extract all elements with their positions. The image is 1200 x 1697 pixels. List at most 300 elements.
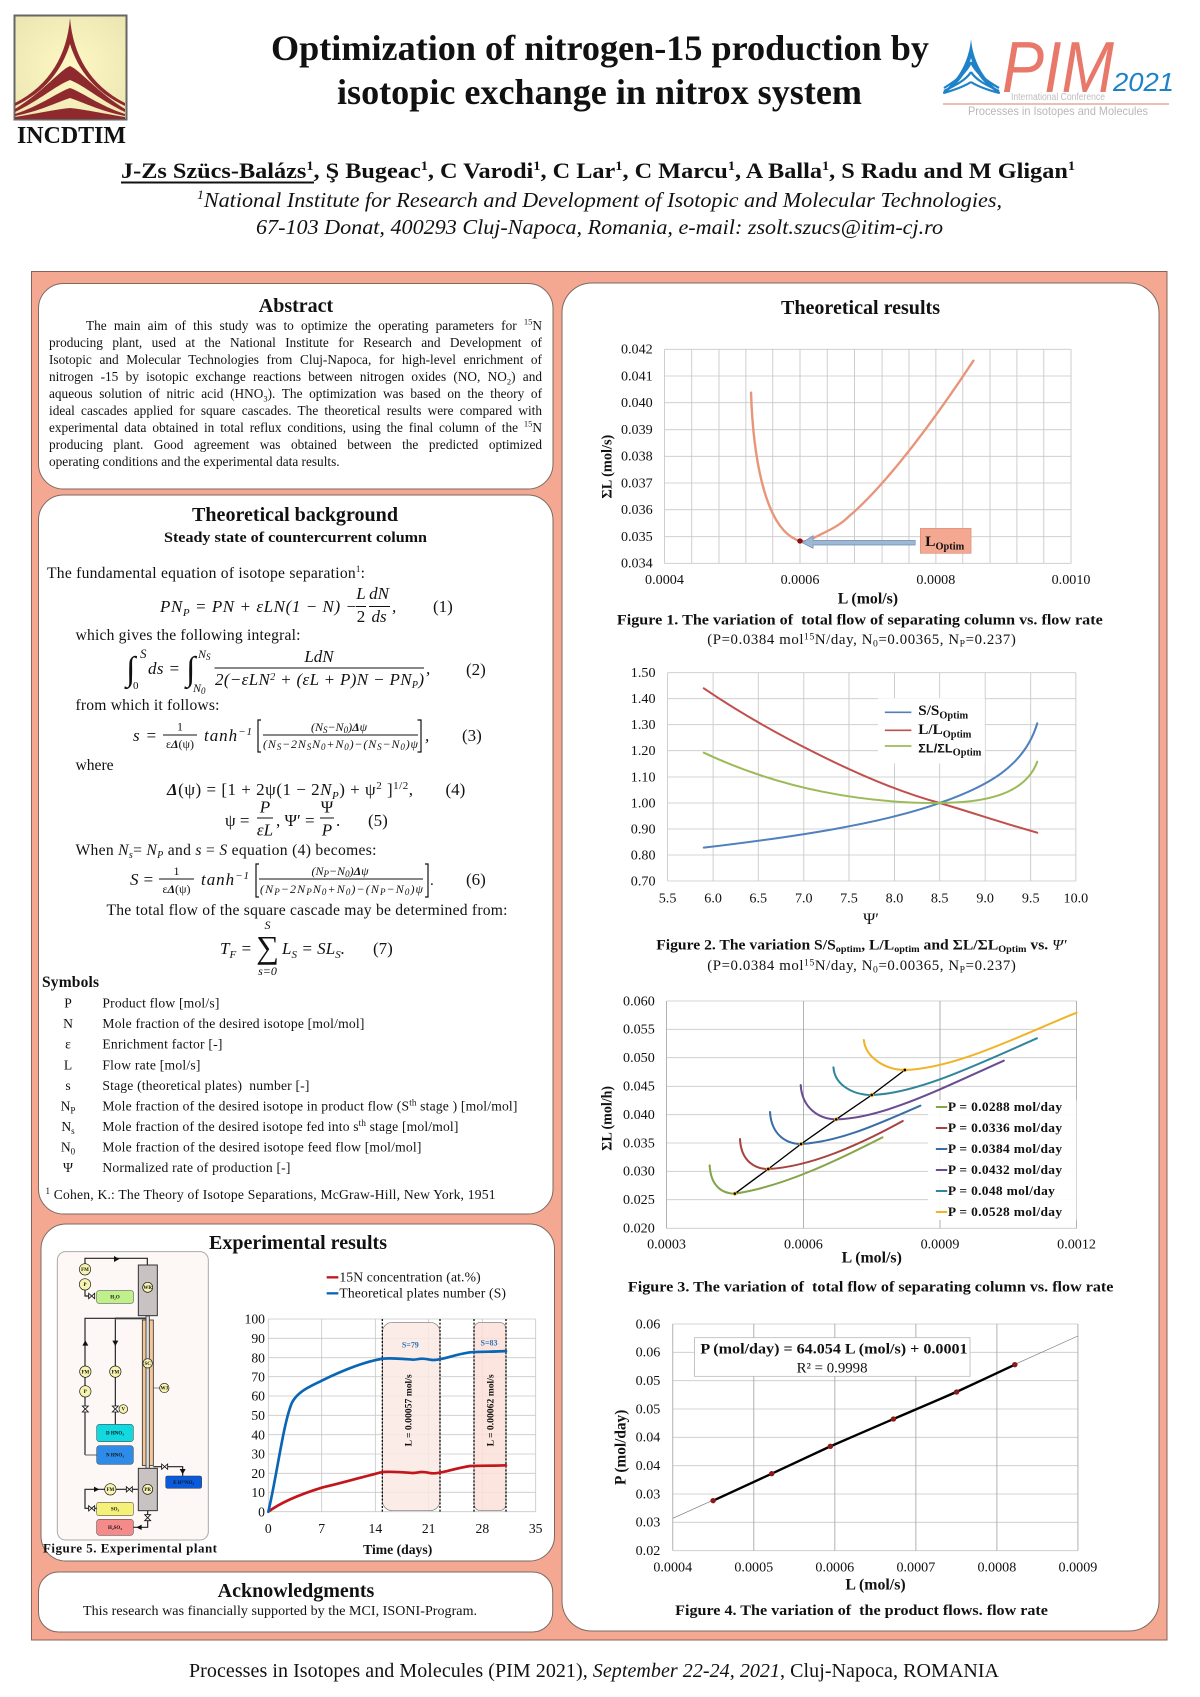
authors: 1 [1068,158,1075,173]
symbols list: th [409,1098,417,1108]
chart: experimental concentration and plates vs time: 80 [251,1350,265,1365]
equation 7: s=0 [258,964,277,978]
equation 6: P [273,887,280,897]
chart: figure 4: 0.0004 [653,1561,692,1576]
legend: L/L [918,722,943,738]
chart: experimental concentration and plates vs time: 0 [265,1521,272,1536]
symbols list: Mole fraction of the desired isotope in product flow (S [102,1099,409,1114]
chart: figure 3: 0.045 [623,1080,655,1095]
authors: 1 [615,158,622,173]
chart: figure 4: 0.05 [636,1403,660,1417]
chart: experimental concentration and plates vs time [245,1270,543,1558]
chart: figure 2 [631,666,1088,976]
chart: figure 1: 0.041 [621,370,653,384]
chart: figure 3: 0.0009 [921,1238,959,1252]
chart: figure 2: 0.80 [631,849,656,863]
equation 3: S [323,725,328,735]
panel: theoretical background: P [156,850,163,861]
equation 6: . [430,873,434,889]
equation 4: ] [382,780,393,799]
chart: experimental concentration and plates vs time: 50 [251,1408,265,1423]
authors: , C Lar [540,158,616,183]
equation 3: )−(N [349,737,377,751]
background panel [32,272,1167,1640]
panel: theoretical background: from which it follows: [76,697,220,714]
equation 6: εΔ(ψ) [162,882,191,896]
chart: figure 1: =0.237) [966,632,1016,648]
equation 2: S [140,646,147,661]
panel: acknowledgments [38,1572,553,1632]
chart: figure 2: 5.5 [659,892,676,906]
logo: PIM 2021: 2021 [1112,67,1174,97]
equation 5: P [259,798,270,816]
equation 3: −2N [282,737,307,751]
equation 6: (N [311,864,323,878]
chart: figure 2: 9.5 [1022,892,1040,906]
equation 4: 2 [376,780,382,792]
caption: figure 2: Ψ′ [1052,938,1067,953]
legend: ΣL/ΣL [918,742,953,756]
equation 3: S [377,742,382,752]
equation 2: 0 [201,686,206,696]
equation 7: = [236,939,252,958]
chart: figure 2: P [960,966,965,976]
abstract text: producing plant. Good agreement was obtained between the predicted optimized [49,437,542,452]
diagram: experimental plant: D HNO [106,1431,122,1436]
chart: figure 2: 9.0 [976,892,994,906]
equation 4: (4) [446,780,465,799]
equation 6: P [322,869,329,879]
chart: figure 2: 1.50 [631,666,656,681]
legend [928,1099,1077,1220]
diagram: experimental plant: SO [114,1526,120,1531]
authors: , A Balla [735,158,822,183]
equation 4: ) + ψ [339,780,376,799]
diagram: experimental plant: 3 [122,1454,124,1458]
chart: figure 4: 0.04 [636,1431,660,1446]
separating column [142,1316,153,1468]
authors: , S Radu and M Gligan [829,158,1068,183]
chart: figure 4: 0.0005 [734,1561,773,1576]
equation 4 [166,780,465,802]
caption: figure 4: Figure 4. The variation of the product flows. flow rate [675,1603,1049,1619]
equation 3: +N [326,737,344,751]
chart: figure 2: 7.5 [840,892,858,906]
equation 3: 0 [321,742,326,752]
equation 6: N [312,882,322,896]
reference: Cohen, K.: The Theory of Isotope Separations, McGraw-Hill, New York, 1951 [50,1187,496,1202]
caption: figure 2: Figure 2. The variation S/S [656,938,827,953]
diagram: experimental plant: E H [173,1481,182,1486]
authors: 1 [421,158,428,173]
equation 6: Δψ [354,864,369,878]
symbols list: P [70,1106,75,1116]
chart: experimental concentration and plates vs time: Time (days) [363,1542,432,1558]
diagram: experimental plant: H [110,1296,114,1301]
chart: figure 1 [599,343,1103,650]
chart: figure 3: 0.0003 [647,1238,686,1252]
abstract text: aqueous solution of nitric acid (HNO3). The optimization was based on the theory of [49,386,542,404]
chart: figure 2: 1.20 [631,744,656,759]
affiliation: 1 [197,187,204,202]
diagram: experimental plant: 3 [117,1509,119,1513]
symbols list: stage ) [mol/mol] [417,1099,517,1115]
chart: figure 2: 7.0 [795,892,813,906]
symbols list: Mole fraction of the desired isotope feed flow [mol/mol] [102,1140,421,1155]
chart: figure 3: 0.040 [623,1108,655,1123]
legend: P = 0.0288 mol/day [948,1099,1062,1114]
equation 3: 0 [400,742,405,752]
equation 2: 2 [270,672,275,683]
logo: PIM 2021: International Conference [1011,92,1105,103]
diagram: experimental plant: P [83,1283,87,1288]
panel: theoretical background: s = S equation (4) becomes: [195,842,376,859]
caption: figure 2: and ΣL/ΣL [920,938,999,953]
symbols list: N [61,1119,71,1134]
chart: figure 2: (P=0.0384 mol [707,958,803,974]
chart: experimental concentration and plates vs time: 30 [251,1447,265,1462]
equation 6: 0 [346,887,351,897]
chart: figure 4 [612,1318,1097,1619]
equation 3: −N [382,737,400,751]
equation 3: )ψ [405,737,419,751]
chart: figure 1: 15 [804,632,815,642]
symbols list: ε [65,1037,71,1052]
authors: , C Marcu [622,158,728,183]
panel: abstract: Abstract [259,295,334,317]
authors: 1 [728,158,735,173]
diagram: experimental plant [57,1252,208,1540]
equation 6: tanh [201,870,234,889]
chart: figure 3: 0.035 [623,1137,655,1151]
legend: P = 0.0432 mol/day [948,1162,1062,1177]
equation 6: P [305,887,312,897]
authors [121,158,1075,184]
chart: experimental concentration and plates vs time: 20 [251,1466,265,1481]
chart: experimental concentration and plates vs time: 7 [318,1521,325,1536]
caption: figure 2: optim [894,945,920,955]
equation 3: −1 [238,726,252,738]
equation 3: (3) [462,726,482,745]
chart: experimental concentration and plates vs time: 14 [369,1521,382,1536]
PR column [138,1468,157,1511]
equation 6: 0 [405,887,410,897]
symbols list: s [71,1126,75,1136]
chart: figure 2: 8.0 [886,892,903,906]
panel: theoretical background [38,495,553,1214]
symbols list: s [65,1078,71,1093]
chart: figure 1: 0.035 [621,530,653,545]
panel: theoretical background: where [76,757,114,774]
chart: experimental concentration and plates vs time: 35 [529,1521,543,1536]
equation 1: (1) [433,597,453,616]
legend: Optim [953,747,982,758]
chart: figure 1: 0.038 [621,450,653,465]
chart: figure 2: 0.90 [631,823,656,837]
symbols list: N [61,1099,70,1114]
symbols list: L [64,1057,72,1072]
title [271,28,929,112]
chart: figure 1: 0.034 [621,557,653,572]
diagram: experimental plant: 3 [122,1432,124,1436]
abstract text: experimental data obtained in total reflux conditions, using the final column of the 15N [49,419,542,435]
equation 6 [130,864,486,897]
panel: acknowledgments: Acknowledgments [218,1580,375,1602]
symbols list [61,995,517,1175]
legend: Optim [939,710,969,721]
equation 6: 0 [322,887,327,897]
authors: 1 [822,158,829,173]
chart: figure 1: N/day, N [815,632,873,648]
equation 5: . [336,811,340,830]
equation 2: (2) [466,660,486,679]
equation 1: = PN + εLN(1 − N) − [190,597,357,616]
chart: figure 3: 0.050 [623,1051,655,1066]
abstract text: ideal cascades applied for square cascades. The theoretical results were compared with [49,403,542,418]
legend: P = 0.048 mol/day [948,1183,1055,1198]
equation 3: tanh [204,726,237,745]
chart: experimental concentration and plates vs time: 100 [245,1312,265,1327]
chart: figure 1: 0.037 [621,477,653,491]
regression equation: R² = 0.9998 [797,1361,868,1376]
intro line: : [361,565,365,582]
equation 6: P [379,887,386,897]
equation 7: S [264,918,270,932]
equation 3 [133,720,482,752]
symbols list: Stage (theoretical plates) number [-] [102,1078,309,1094]
panel: theoretical background: which gives the following integral: [76,627,300,644]
symbols heading: Symbols [42,974,99,991]
chart: experimental concentration and plates vs time: 0 [258,1504,265,1519]
chart: figure 1: 0.036 [621,503,653,518]
chart: figure 3: 0.0006 [784,1238,823,1252]
equation 2: N [198,647,206,661]
equation 4: , [409,780,413,799]
legend [878,698,985,763]
diagram: experimental plant: 2 [114,1297,116,1301]
symbols list: 0 [71,1147,76,1157]
equation 6: S = [130,870,154,889]
chart: figure 2: Ψ′ [863,910,879,928]
equation 1: P [182,607,190,619]
symbols list: Flow rate [mol/s] [102,1057,200,1072]
equation 2: ∫ [184,651,198,690]
symbols list: stage [mol/mol] [366,1119,458,1134]
equation 4: P [331,790,339,802]
equation 2: , [426,659,430,678]
regression equation: P (mol/day) = 64.054 L (mol/s) + 0.0001 [700,1342,968,1358]
chart: figure 3: 0.030 [623,1165,655,1180]
equation 2: + (εL + P)N − PN [276,670,413,689]
equation 3: N [311,737,321,751]
equation 3: S [277,742,282,752]
chart: figure 2: 0 [873,966,878,976]
chart: figure 4: L (mol/s) [845,1577,906,1593]
symbols list: Mole fraction of the desired isotope fed into s [102,1119,359,1134]
equation 1 [159,584,453,626]
authors: , C Varodi [428,158,533,183]
equation 3: −N [327,720,345,734]
chart: figure 1: =0.00365, N [878,632,960,648]
logo: INCDTIM [14,16,126,149]
diagram: experimental plant: FM [111,1370,120,1375]
chart: figure 4: 0.0006 [815,1561,854,1576]
panel: theoretical background: The total flow of the square cascade may be determined from: [106,902,508,919]
caption: figure 3: Figure 3. The variation of total flow of separating column vs. flow rate [628,1280,1114,1296]
caption: figure 2: vs. [1027,938,1052,953]
equation 6: −N [329,864,346,878]
chart: figure 1: 0.0006 [781,573,819,588]
symbols list: P [64,995,72,1010]
chart: figure 2: 1.00 [631,797,656,811]
equation 5: , Ψ′ = [276,811,315,830]
chart: figure 2: =0.237) [966,958,1016,974]
abstract text: The main aim of this study was to optimize the operating parameters for 15N [86,317,542,333]
legend: P = 0.0528 mol/day [948,1204,1062,1219]
chart: experimental concentration and plates vs time: Theoretical plates number (S) [339,1286,506,1302]
chart: figure 4: 0.0007 [896,1561,935,1576]
equation 5: P [321,820,332,840]
equation 7: (7) [373,939,393,958]
panel: experimental results [41,1224,554,1561]
title: isotopic exchange in nitrox system [337,72,862,112]
equation 5: (5) [368,811,388,830]
diagram: experimental plant: PR [144,1488,151,1493]
equation 5: Ψ [321,798,334,816]
equation 3: (N [263,737,276,751]
diagram: experimental plant: SC [144,1362,151,1367]
legend: S/S [918,703,939,719]
intro line: The fundamental equation of isotope separation [47,565,356,582]
affiliation [197,187,1002,239]
equation 1: , [392,597,396,616]
chart: figure 4: 0.02 [636,1544,660,1559]
chart: figure 1: P [960,640,965,650]
chart: figure 3: 0.0012 [1057,1238,1096,1252]
chart: figure 4: 0.06 [636,1346,660,1361]
equation 6: 0 [345,869,350,879]
chart: figure 2: 15 [804,958,815,968]
equation 2: N [193,681,201,695]
title: Optimization of nitrogen-15 production by [271,28,929,68]
logo: INCDTIM: INCDTIM [17,123,126,149]
chart: figure 1: 0.0004 [645,573,684,588]
equation 2: S [206,652,211,662]
abstract text: operating conditions and the experimental data results. [49,454,340,469]
chart: figure 4: P (mol/day) [612,1410,630,1485]
symbols list: N [61,1140,71,1155]
intro line: 1 [356,564,360,574]
chart: figure 3: L (mol/s) [842,1250,902,1267]
abstract text: Isotopic and Molecular Technologies from Cluj-Napoca, for high-level enrichment of [49,352,542,367]
diagram: experimental plant: NO [185,1481,193,1486]
chart: figure 1: ΣL (mol/s) [599,435,615,499]
chart: figure 3: 0.025 [623,1193,655,1208]
equation 3: , [425,726,429,745]
chart: figure 2: 1.10 [631,771,656,785]
diagram: experimental plant: O [116,1296,120,1301]
equation 2 [124,646,486,696]
caption: figure 2: Optim [998,945,1027,955]
authors: , Ş Bugeac [314,158,421,183]
equation 6: (N [260,882,273,896]
chart: experimental concentration and plates vs time: S=83 [481,1338,497,1347]
heading: Theoretical results [781,297,940,319]
heading: Theoretical background [192,504,399,526]
equation 7: S [335,949,341,961]
chart: figure 4: 0.06 [636,1318,660,1332]
chart: experimental concentration and plates vs time: L = 0.00057 mol/s [404,1374,415,1446]
caption: figure 2: , L/L [861,938,894,953]
equation 1: 2 [357,607,365,626]
chart: figure 1: 0 [873,640,878,650]
diagram: experimental plant: 4 [120,1527,122,1531]
diagram: experimental plant: P [84,1390,87,1395]
abstract text: nitrogen -15 by isotopic exchange reactions between nitrogen oxides (NO, NO2) and [49,369,542,387]
equation 5 [225,798,388,840]
chart: figure 2: 0.70 [631,875,656,889]
affiliation: National Institute for Research and Development of Isotopic and Molecular Technologies, [203,188,1002,212]
chart: experimental concentration and plates vs time: 90 [251,1331,265,1346]
equation 3: Δψ [352,720,367,734]
equation 1: dN [369,584,391,603]
chart: figure 2: 10.0 [1064,892,1088,906]
chart: experimental concentration and plates vs time: 15N concentration (at.%) [339,1270,481,1286]
equation 1: L [355,584,366,603]
logo: PIM 2021: PIM [1002,28,1114,108]
equation 2: LdN [303,647,335,666]
logo: PIM 2021: Processes in Isotopes and Molecules [968,104,1148,118]
equation 3: εΔ(ψ) [166,737,194,751]
affiliation: 67-103 Donat, 400293 Cluj-Napoca, Romania, e-mail: zsolt.szucs@itim-cj.ro [256,215,943,239]
equation 2: P [411,680,418,691]
equation 4: 1/2 [393,780,408,792]
chart: figure 1: 0.042 [621,343,653,358]
chart: figure 2: N/day, N [815,958,873,974]
regression equation [694,1338,970,1376]
chart: figure 4: 0.03 [636,1516,660,1531]
WR column [138,1265,157,1316]
symbols list: Normalized rate of production [-] [102,1160,290,1175]
equation 6: −1 [235,870,249,882]
caption: figure 2: optim [836,945,861,955]
equation 5: ψ = [225,811,249,830]
chart: experimental concentration and plates vs time: 28 [476,1521,489,1536]
chart: figure 2: 8.5 [931,892,949,906]
equation 7: F [228,949,236,961]
chart: experimental concentration and plates vs time: 10 [251,1485,265,1500]
equation 2: ds = [148,659,180,678]
equation 6: −N [387,882,405,896]
equation 3: s = [133,726,157,745]
equation 1: PN [160,597,182,616]
equation 7: L [282,939,291,958]
legend: P = 0.0336 mol/day [948,1120,1062,1135]
diagram: experimental plant: SO [111,1508,117,1513]
chart: figure 2: =0.00365, N [878,958,960,974]
chart: figure 4: 0.04 [636,1459,660,1474]
logo: PIM 2021 [943,28,1174,118]
panel: theoretical background: N [145,842,158,859]
symbols list: Mole fraction of the desired isotope [mol/mol] [102,1016,364,1031]
chart: figure 1: 0.040 [621,396,653,411]
diagram: experimental plant: WJ [161,1387,169,1392]
equation 3: 0 [344,725,349,735]
equation 6: ) [349,864,354,878]
chart: experimental concentration and plates vs time: 21 [422,1521,436,1536]
equation 2: ∫ [124,651,138,690]
authors: 1 [306,158,314,173]
